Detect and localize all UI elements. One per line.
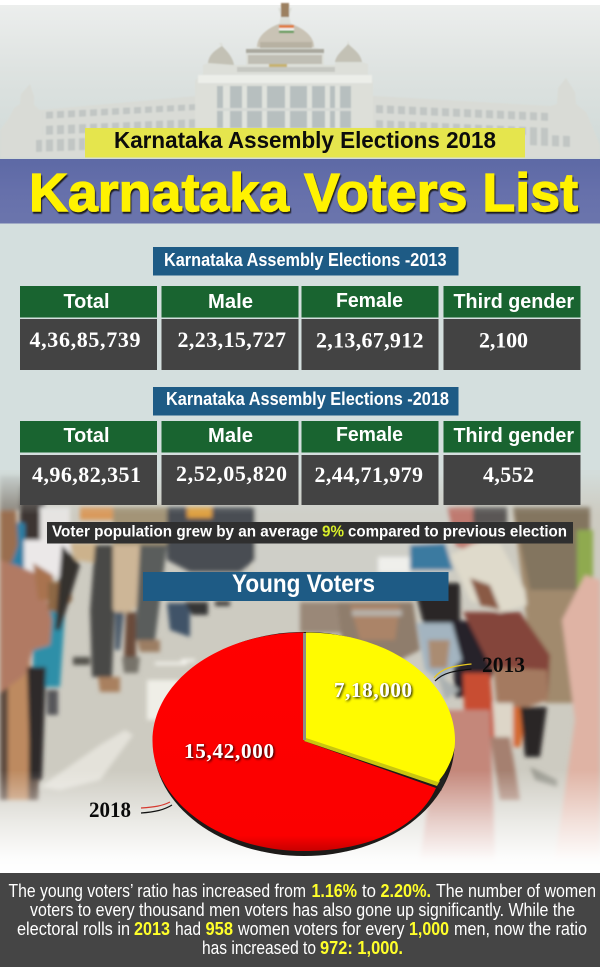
column: third gender 2013 (444, 286, 580, 370)
column: third gender 2013: Third gender (454, 291, 574, 313)
footer line 3: women voters for every (237, 919, 404, 939)
heading: elections 2013: Karnataka Assembly Elections -2013 (164, 250, 446, 270)
callout: voter population growth: Voter population grew by an average (52, 524, 318, 540)
mist fade over top of photo (0, 440, 600, 515)
footer line 4: 972: 1,000. (320, 938, 403, 958)
footer line 4: has increased to (202, 938, 316, 958)
callout: voter population growth (47, 522, 573, 544)
column: male 2013 (162, 286, 298, 370)
centre voters (300, 602, 345, 633)
column: third gender 2018 (444, 421, 580, 505)
column: total 2013: Total (64, 291, 110, 313)
footer line 1: The young voters’ ratio has increased from (8, 881, 306, 901)
column: male 2018: Male (208, 425, 253, 447)
callout: voter population growth: compared to previous election (348, 524, 567, 540)
column: total 2018 (20, 421, 157, 505)
value label: 2013: 7,18,000 (334, 678, 412, 702)
column: male 2013: Male (208, 291, 253, 313)
main title: Karnataka Voters List: Karnataka Voters List (29, 163, 578, 223)
column: male 2018 (162, 421, 298, 505)
column: total 2013 (20, 286, 157, 370)
leader line: 2018 (141, 802, 172, 813)
heading: elections 2018: Karnataka Assembly Elections -2018 (166, 389, 449, 409)
footer line 3: 958 (206, 919, 233, 939)
footer line 3: 2013 (134, 919, 170, 939)
column: female 2013 (302, 286, 438, 370)
column: female 2013: Female (336, 290, 403, 312)
right-side voters (447, 507, 480, 557)
illustration: Vidhana Soudha building (0, 3, 600, 158)
slice: 2013 yellow (303, 632, 455, 791)
column: third gender 2013: 2,100 (479, 328, 528, 352)
column: male 2013: 2,23,15,727 (178, 327, 286, 352)
heading: young voters: Young Voters (232, 570, 375, 598)
subtitle: Karnataka Assembly Elections 2018: Karnataka Assembly Elections 2018 (114, 127, 496, 153)
column: third gender 2018: Third gender (454, 425, 574, 447)
column: female 2018: 2,44,71,979 (314, 462, 423, 487)
table: 2018 results (20, 387, 580, 505)
column: total 2018: 4,96,82,351 (32, 462, 141, 487)
left-side voters (0, 475, 25, 510)
wings and towers silhouette (0, 78, 600, 158)
footer line 3: 1,000 (409, 919, 449, 939)
footer line 1: 1.16% (312, 881, 357, 901)
white fade over bottom of photo (0, 770, 600, 873)
column: female 2018 (302, 421, 438, 505)
heading: young voters (143, 570, 448, 601)
sky background (0, 5, 600, 160)
photo: crowd of voters (0, 470, 600, 870)
heading: elections 2018 (153, 387, 458, 416)
column: total 2018: Total (64, 425, 110, 447)
column: female 2013: 2,13,67,912 (316, 328, 424, 352)
callout: voter population growth: 9% (322, 524, 344, 540)
footer panel: summary text (0, 873, 600, 967)
footer line 3: had (175, 919, 201, 939)
title band (0, 127, 600, 224)
footer line 3: men, now the ratio (454, 919, 587, 939)
centre-left voters (80, 507, 113, 520)
slice: 2018 red (152, 632, 436, 851)
callout label: 2018: 2018 (89, 797, 131, 822)
heading: elections 2013 (153, 247, 458, 276)
callout label: 2013: 2013 (482, 652, 525, 677)
table: 2013 results (20, 247, 580, 370)
column: total 2013: 4,36,85,739 (30, 327, 140, 352)
footer line 1: 2.20%. (380, 881, 431, 901)
footer line 3: electoral rolls in (17, 919, 130, 939)
footer line 1: to (362, 881, 376, 901)
column: female 2018: Female (336, 424, 403, 446)
leader line: 2013 (434, 664, 472, 681)
pie shadow edge (154, 632, 454, 856)
column: third gender 2018: 4,552 (483, 462, 534, 487)
column: male 2018: 2,52,05,820 (176, 461, 287, 486)
pie chart: young voters (89, 632, 525, 856)
value label: 2018: 15,42,000 (184, 739, 274, 763)
central block (195, 8, 373, 128)
ground (253, 500, 453, 575)
